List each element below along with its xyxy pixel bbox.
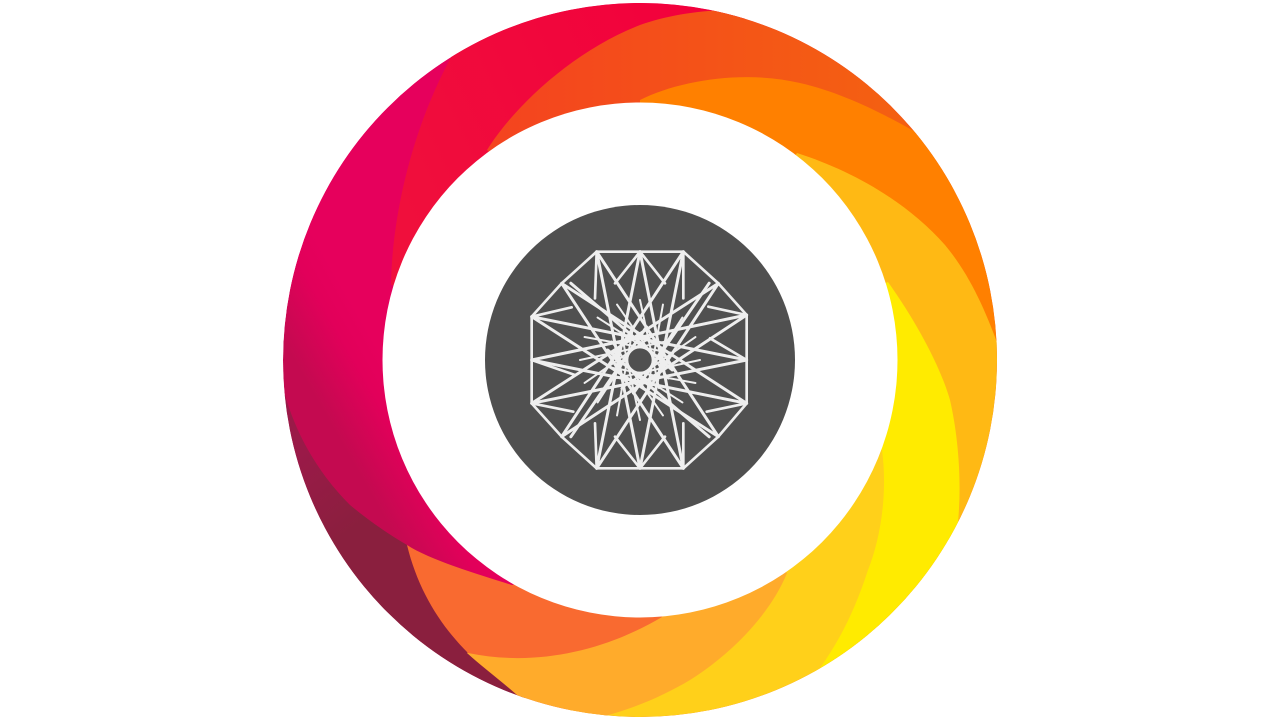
star: outer outline [532, 252, 747, 468]
logo: swirl ring with centre badge [283, 3, 997, 717]
segment: orange [640, 77, 997, 364]
star: free-ended chords [558, 272, 722, 448]
star: inner tangent chords [577, 297, 703, 423]
segment: magenta [283, 3, 997, 717]
segment: yellow [812, 282, 960, 673]
segment: red orange [487, 10, 954, 191]
segment: golden [796, 153, 997, 540]
star: centre hole [627, 347, 653, 373]
segment: red [391, 0, 760, 300]
segment: maroon [284, 395, 524, 698]
ring: white inner disc [382, 102, 898, 618]
icon: geometric star [532, 252, 747, 468]
centre badge: dark disc [485, 205, 795, 515]
segment: gold [568, 450, 884, 717]
star: short spokes [532, 252, 747, 468]
ring: colour segments [250, 0, 1020, 720]
segment: amber [467, 572, 787, 716]
star: long chords [532, 252, 747, 468]
segment: bottom orange [407, 545, 662, 658]
